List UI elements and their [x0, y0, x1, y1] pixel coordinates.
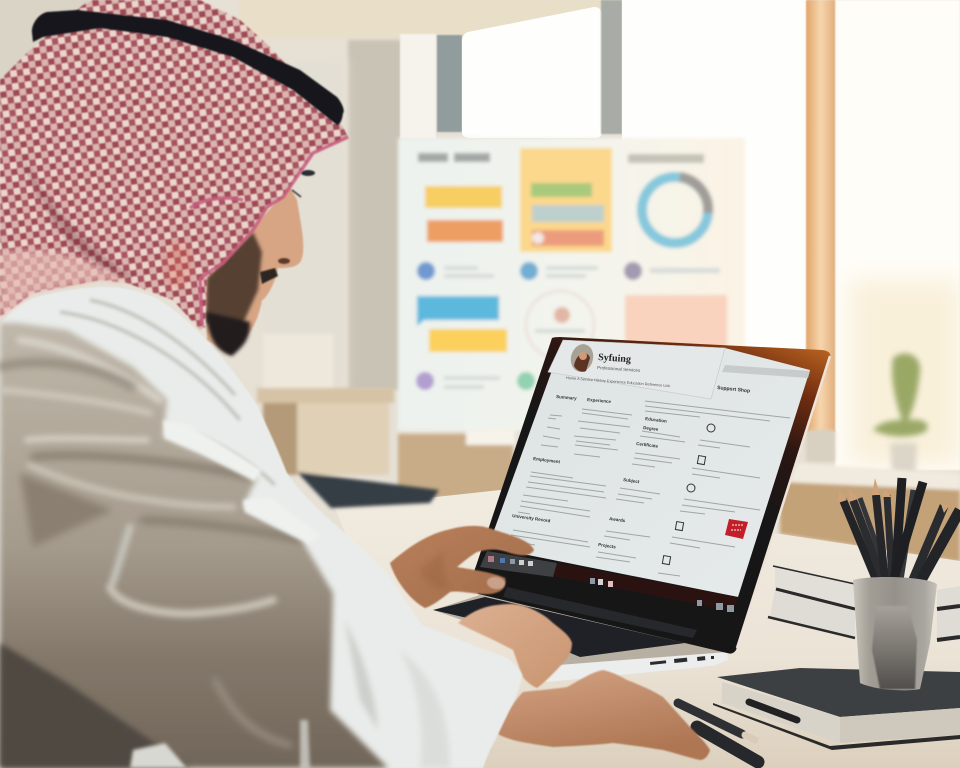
profile subtitle: Professional Services — [597, 365, 641, 373]
pink scarf border — [190, 137, 348, 325]
pen on desk — [678, 703, 758, 762]
profile tabs: Home A Service History Experience Education Reference Link — [566, 376, 670, 388]
blue and yellow boxes — [417, 296, 507, 352]
pencil holder — [838, 478, 960, 690]
man's hand pointing at screen — [390, 526, 534, 608]
board heading bars — [418, 153, 704, 164]
white fold tips — [163, 420, 320, 768]
resume text lines — [509, 401, 790, 576]
resume section headings: Awards — [609, 516, 626, 523]
central orange panel — [520, 148, 612, 252]
icon row one — [417, 262, 720, 280]
background cabinet — [257, 334, 439, 508]
laptop — [433, 337, 830, 682]
sleeve fold shadows — [345, 620, 450, 768]
stacked books — [768, 565, 960, 641]
robe dark lower-left — [0, 643, 190, 768]
taskbar — [480, 551, 738, 612]
profile popup panel — [548, 340, 725, 399]
red QR stamp — [725, 519, 748, 539]
scarf pale lower fold — [0, 250, 127, 317]
resume section headings: Projects — [598, 542, 617, 550]
eye — [292, 170, 315, 197]
mustache — [260, 268, 278, 284]
robe white outer layer — [0, 287, 522, 768]
peach panel — [625, 295, 727, 350]
scarf fold shadow — [20, 150, 133, 277]
hinge strip — [503, 587, 697, 638]
skin — [205, 187, 303, 355]
beard — [206, 312, 250, 356]
window sill and lower wall — [398, 429, 960, 562]
side column icons — [662, 424, 715, 565]
resume section headings: Experience — [587, 397, 612, 404]
icon row two — [416, 372, 535, 390]
profile photo — [568, 342, 596, 374]
pencil tips — [838, 478, 949, 513]
black agal headband — [32, 10, 344, 125]
man's face and beard — [205, 170, 315, 356]
stubble cheek — [206, 232, 262, 330]
robe fold shadows — [0, 363, 300, 745]
resume section headings: Certificate — [636, 441, 659, 449]
man's resting hand on keyboard — [458, 604, 572, 688]
desk — [335, 490, 960, 768]
notebook clip — [749, 702, 797, 720]
resume section headings: Summary — [556, 394, 577, 401]
robe grey-taupe back — [0, 323, 388, 768]
window panes and frames — [437, 0, 960, 470]
notebook on desk — [713, 668, 960, 750]
resume section headings: University Record — [512, 513, 551, 523]
ring diagram — [526, 291, 594, 359]
robe fold highlights — [0, 340, 273, 614]
donut chart — [642, 177, 708, 243]
man's white robe — [0, 287, 522, 768]
resume section headings: Education — [645, 416, 667, 424]
nose shadow — [278, 258, 290, 264]
profile name: Syfuing — [598, 352, 631, 365]
laptop screen — [488, 340, 810, 597]
resume section headings: Support Shop — [717, 385, 750, 394]
resume section headings: Subject — [623, 477, 640, 484]
resume section headings — [512, 385, 750, 550]
potted plant on window sill — [873, 353, 928, 487]
resume section headings: Employment — [533, 456, 561, 464]
laptop lid bezel — [473, 337, 830, 654]
pale patch at robe hem — [130, 743, 187, 768]
laptop base and keyboard — [433, 595, 728, 682]
header strip on screen — [722, 365, 810, 378]
pencils — [843, 478, 960, 582]
scarf warm glow — [164, 241, 192, 289]
yellow and orange boxes — [425, 186, 503, 242]
man's red-checkered headscarf — [0, 0, 348, 330]
resume section headings: Degree — [643, 425, 659, 432]
man's lower hand on desk — [497, 670, 710, 760]
cup — [853, 577, 937, 690]
blurred wall board with infographic — [398, 138, 745, 431]
grey creases in white shoulder band — [60, 300, 275, 485]
